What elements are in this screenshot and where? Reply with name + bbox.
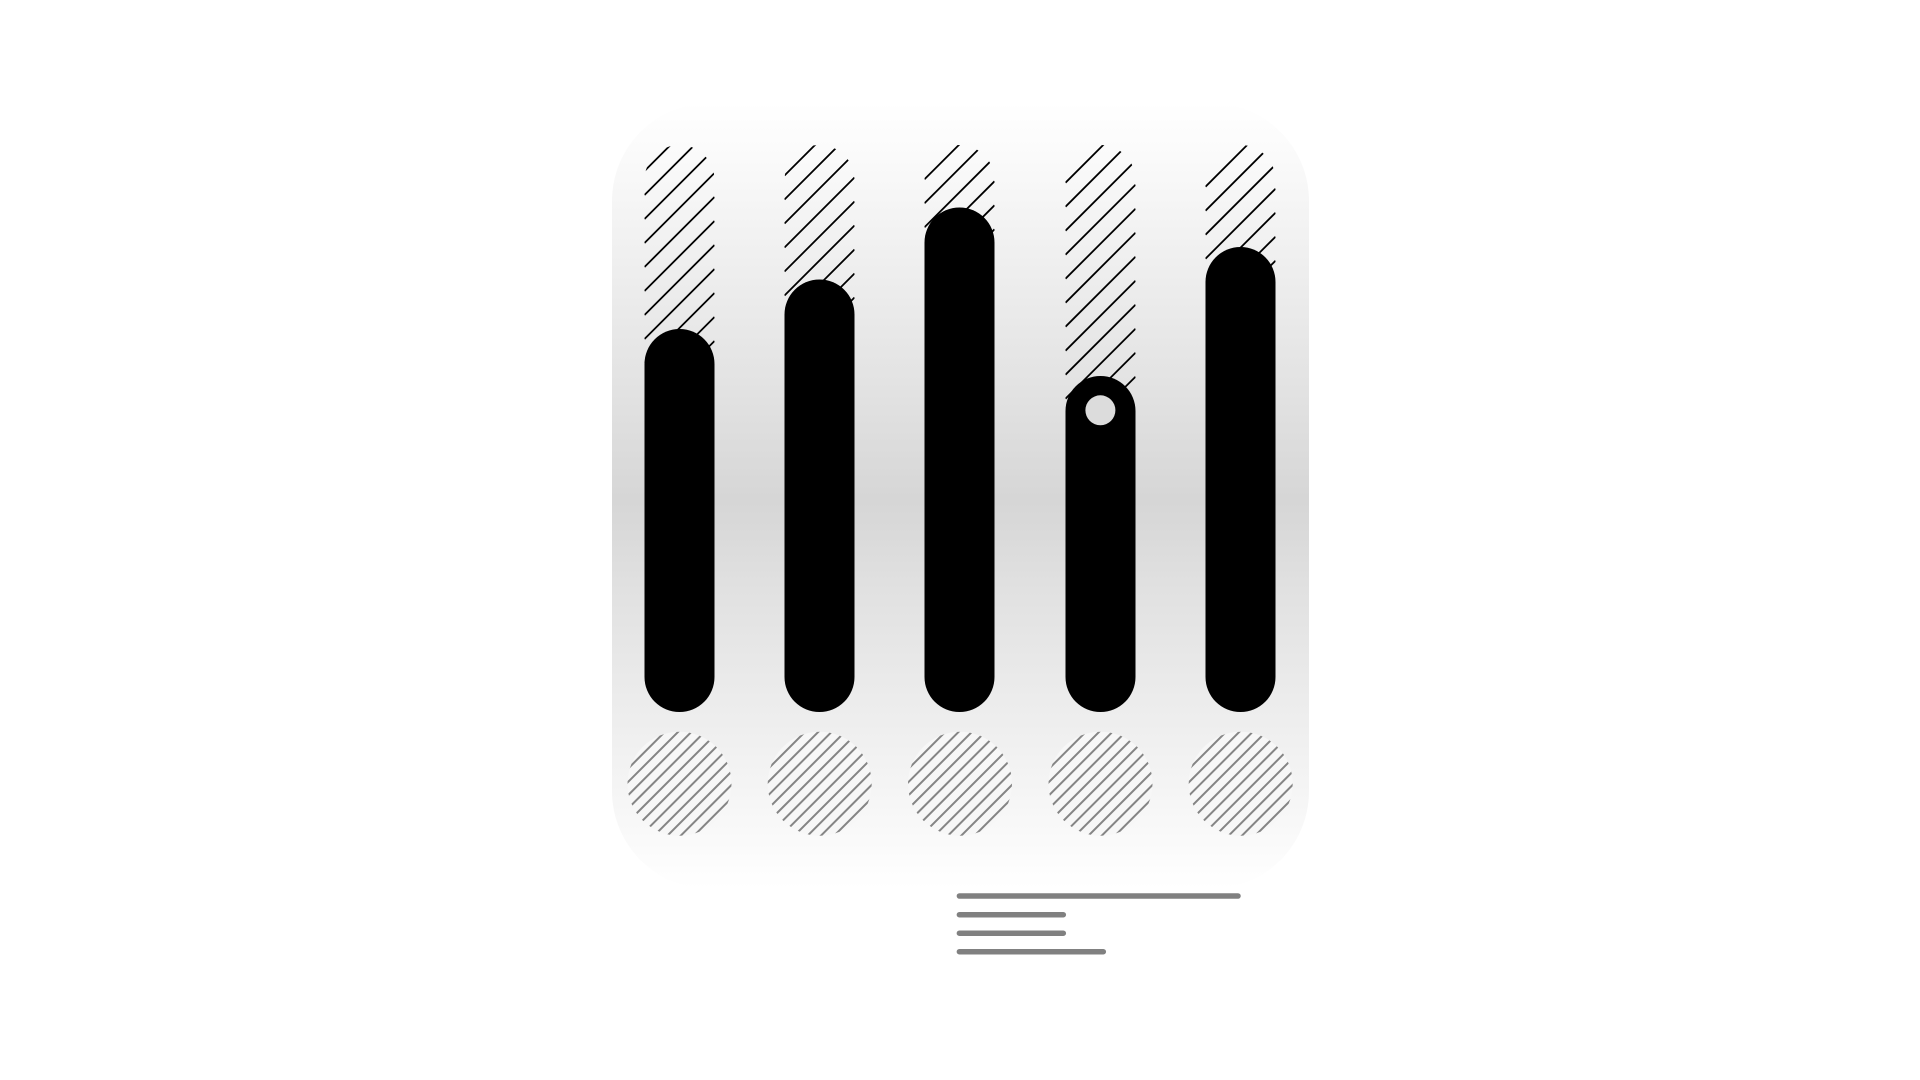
hatch track: column 4: [1066, 145, 1136, 400]
marker dot on bar 4: [1085, 395, 1115, 425]
bar: column 3: [924, 208, 994, 712]
hatch track: column 1: [644, 146, 714, 364]
bar: column 5: [1206, 247, 1276, 712]
legend: placeholder text lines: [959, 896, 1238, 952]
panel: rounded gradient background: [612, 103, 1309, 889]
bar: column 4: [1066, 376, 1136, 712]
icon: hatched circle 2: [760, 657, 880, 910]
icon: hatched circle 5: [1181, 657, 1301, 910]
hatch track: column 3: [924, 145, 994, 232]
bar: column 2: [784, 280, 854, 712]
hatch track: column 5: [1206, 145, 1276, 282]
icon: hatched circle 3: [900, 657, 1020, 910]
hatch track: column 2: [784, 145, 854, 302]
bar: column 1: [644, 329, 714, 712]
icon: hatched circle 4: [1040, 657, 1160, 910]
icon: hatched circle 1: [620, 657, 740, 910]
